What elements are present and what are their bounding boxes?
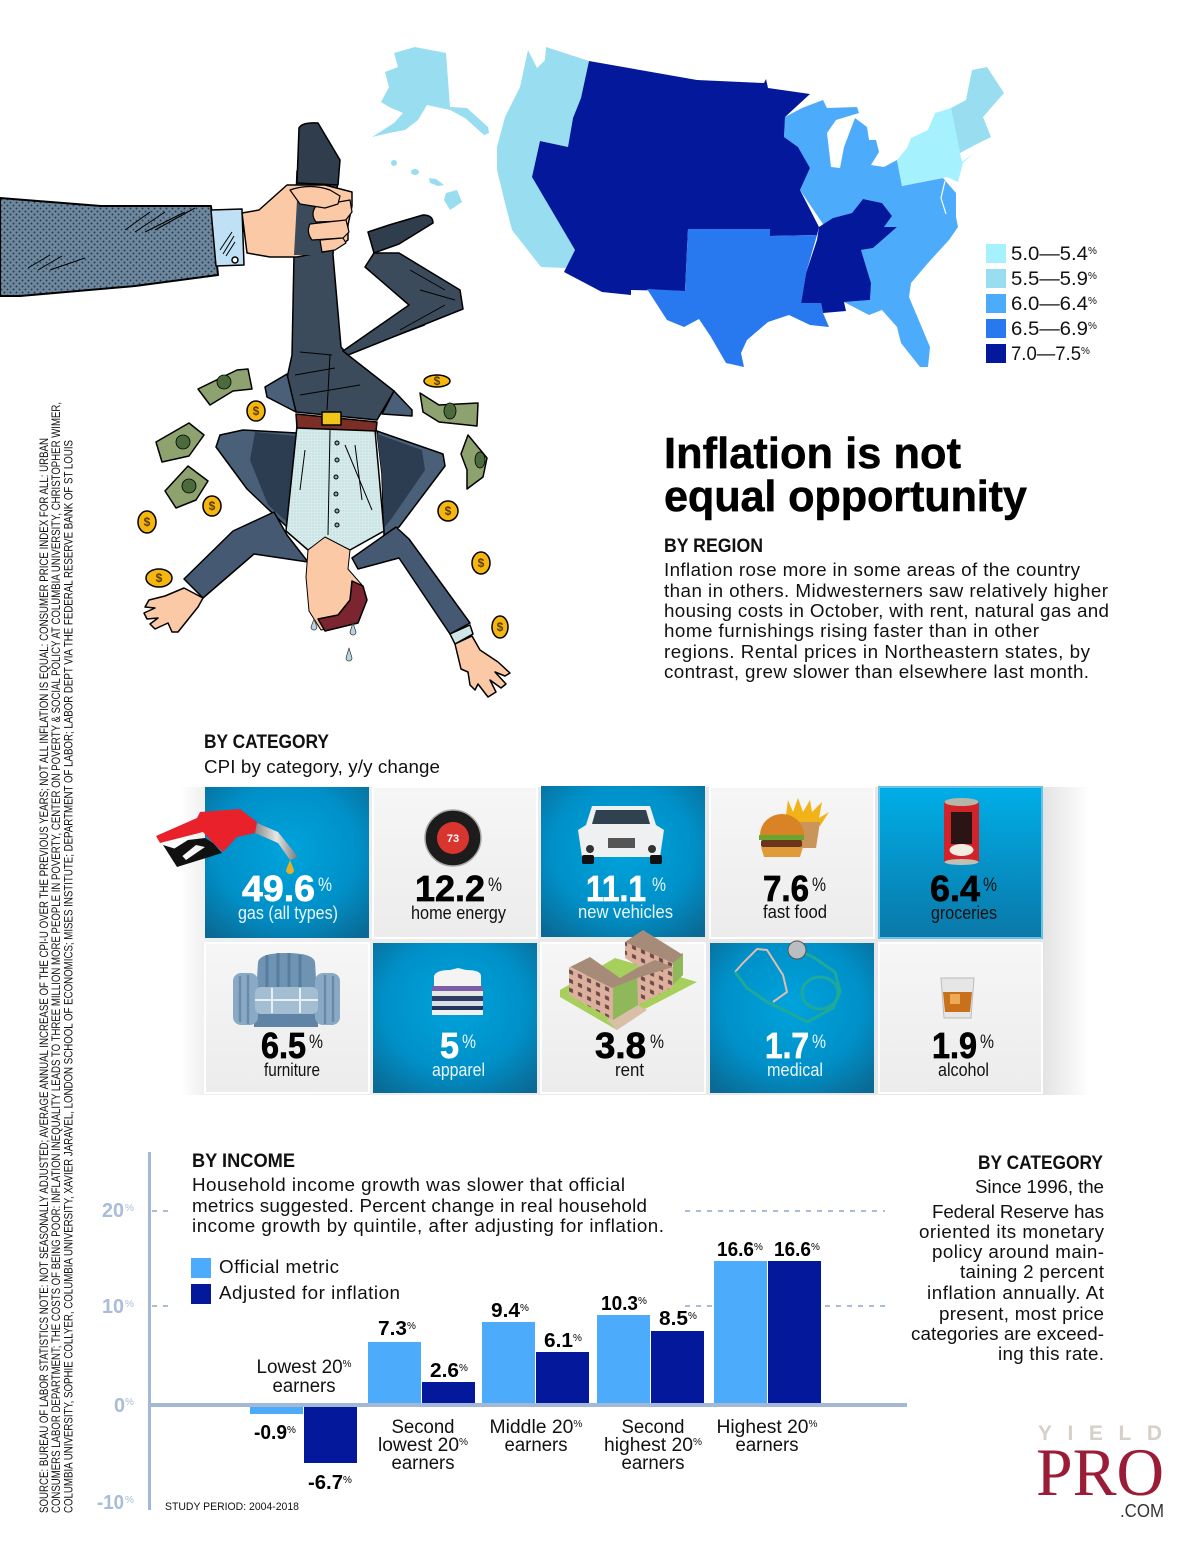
left jacket lining <box>250 432 300 522</box>
group: second highest 20% <box>597 1293 704 1474</box>
group: middle 20%: 6.1 <box>544 1330 573 1352</box>
gold coins <box>138 375 508 638</box>
study period note: STUDY PERIOD: 2004-2018 <box>165 1501 299 1513</box>
right jacket flap <box>377 431 445 535</box>
group: second lowest 20%: earners <box>392 1453 454 1474</box>
card: medical: 1.7 <box>765 1025 809 1066</box>
gridlines <box>152 1211 885 1306</box>
card: gas: gas (all types) <box>238 903 338 923</box>
fingers <box>290 186 352 252</box>
card: medical: medical <box>767 1060 823 1080</box>
group: second lowest 20%: Second <box>392 1417 454 1438</box>
region: Midwest and Southeast <box>784 100 958 367</box>
text block: by category sidebar: BY CATEGORY <box>978 1153 1103 1174</box>
y axis labels: 20 <box>102 1200 124 1222</box>
group: highest 20%: Highest 20 <box>716 1417 807 1438</box>
group: lowest 20%: % <box>343 1475 352 1486</box>
group: second highest 20%: earners <box>622 1453 684 1474</box>
right cuff <box>450 625 473 644</box>
card: fast food <box>710 787 874 938</box>
group: highest 20%: % <box>808 1419 818 1430</box>
icon: whisky glass <box>941 978 974 1018</box>
icon: stethoscope <box>735 941 840 1022</box>
left jacket flap <box>216 430 301 527</box>
y axis labels: % <box>125 1203 134 1214</box>
icon: fuel nozzle <box>156 809 298 874</box>
held shoe <box>297 123 340 185</box>
y axis labels: % <box>125 1397 134 1408</box>
card: fast food: fast food <box>763 902 827 922</box>
y axis labels: % <box>125 1299 134 1310</box>
panel: CPI category grid <box>156 786 1090 1095</box>
shirt buttons and folds <box>300 430 372 535</box>
source note <box>37 402 76 1513</box>
group: middle 20%: % <box>573 1333 582 1344</box>
group: second highest 20%: 8.5 <box>659 1308 688 1330</box>
card: apparel: apparel <box>432 1060 485 1080</box>
card: home energy: 12.2 <box>415 868 485 909</box>
group: second lowest 20%: 7.3 <box>378 1318 407 1340</box>
group: middle 20%: % <box>520 1303 529 1314</box>
group: second highest 20%: % <box>693 1437 702 1448</box>
region: Mid-Atlantic states <box>897 108 974 186</box>
chart legend: Adjusted for inflation <box>219 1282 400 1303</box>
coin dollar signs: $ <box>144 515 151 529</box>
source note: COLUMBIA UNIVERSITY, SOPHIE COLLYER, COLUMBIA UNIVERSITY, XAVIER JARAVEL, LONDON SCHOOL OF ECONOMICS; MISES INSTITUTE; DEPARTMENT OF LABOR; LABOR DEPT VIA THE FEDERAL RESERVE BANK OF ST LOUIS <box>62 440 76 1513</box>
group: highest 20%: % <box>754 1242 763 1253</box>
y axis labels: 10 <box>102 1296 124 1318</box>
trouser wrinkles <box>295 270 455 410</box>
group: lowest 20%: % <box>287 1425 296 1436</box>
card: furniture: furniture <box>264 1060 320 1080</box>
card: apparel: 5 <box>440 1025 459 1066</box>
left jacket tail <box>265 374 296 412</box>
group: second highest 20%: % <box>688 1311 697 1322</box>
map legend: 5.0—5.4 <box>1011 244 1088 265</box>
text block: by category sidebar: categories are exceed- <box>911 1323 1104 1344</box>
map legend: 7.0—7.5 <box>1011 344 1081 365</box>
region: West South Central states <box>647 229 829 367</box>
card: furniture: 6.5 <box>261 1025 306 1066</box>
text block: by region: contrast, grew slower than elsewhere last month. <box>664 661 1089 682</box>
card: new vehicles <box>541 786 705 937</box>
icon: folded clothes <box>432 968 483 1015</box>
y axis labels <box>97 1200 134 1514</box>
map: inflation by US region <box>372 47 1004 367</box>
card: rent: rent <box>615 1060 644 1080</box>
map legend: 6.5—6.9 <box>1011 319 1088 340</box>
group: highest 20%: 16.6 <box>717 1239 754 1261</box>
icon: thermostat: 73 <box>447 833 459 845</box>
card: fast food: % <box>812 875 826 896</box>
card: alcohol <box>879 943 1042 1093</box>
group: lowest 20%: % <box>343 1359 352 1370</box>
group: second lowest 20%: % <box>459 1437 468 1448</box>
gripping hand <box>242 185 352 257</box>
card: furniture <box>205 943 369 1093</box>
map legend: 5.5—5.9 <box>1011 269 1088 290</box>
heading: by category: BY CATEGORY <box>204 732 329 753</box>
card: groceries: groceries <box>931 903 997 923</box>
y axis labels: 0 <box>114 1395 125 1417</box>
map legend <box>986 244 1097 365</box>
card: gas <box>156 787 369 938</box>
text block: by region: regions. Rental prices in Northeastern states, by <box>664 641 1091 662</box>
coin dollar signs: $ <box>445 504 452 518</box>
Chesapeake bay <box>941 181 946 214</box>
coin dollar signs: $ <box>497 620 504 634</box>
region: Pacific states <box>497 47 589 268</box>
card: medical: % <box>812 1032 826 1053</box>
map legend: % <box>1088 271 1097 282</box>
text block: by category sidebar: ing this rate. <box>998 1343 1104 1364</box>
card: groceries: 6.4 <box>930 868 980 909</box>
text block: by category sidebar: inflation annually. At <box>927 1282 1105 1303</box>
group: middle 20%: earners <box>504 1435 568 1456</box>
text block: by region: than in others. Midwesterners saw relatively higher <box>664 580 1108 601</box>
group: middle 20%: Middle 20 <box>490 1417 572 1438</box>
map legend: % <box>1088 321 1097 332</box>
icon: food can <box>944 798 979 865</box>
region: New England <box>951 67 1004 153</box>
card: new vehicles: new vehicles <box>578 902 673 922</box>
text block: by category sidebar: present, most price <box>939 1303 1104 1324</box>
y axis labels: % <box>125 1495 134 1506</box>
bar chart: income growth by quintile <box>97 1152 907 1514</box>
card: gas: % <box>318 875 332 896</box>
card: rent: 3.8 <box>595 1025 646 1066</box>
card: apparel: % <box>462 1032 476 1053</box>
icon: armchair <box>233 953 340 1027</box>
belt buckle <box>322 412 341 425</box>
group: second highest 20%: % <box>638 1296 647 1307</box>
map legend: % <box>1088 296 1097 307</box>
card: alcohol: 1.9 <box>932 1025 977 1066</box>
group: second highest 20%: highest 20 <box>604 1435 692 1456</box>
text block: by category sidebar: policy around main- <box>932 1241 1104 1262</box>
group: highest 20%: 16.6 <box>774 1239 811 1261</box>
card: groceries <box>879 787 1042 938</box>
text block: by region: housing costs in October, with rent, natural gas and <box>664 600 1109 621</box>
title: equal opportunity <box>664 473 1027 521</box>
held trouser leg <box>287 171 394 420</box>
text block: by category sidebar: taining 2 percent <box>960 1261 1105 1282</box>
text block: by region <box>664 536 1109 682</box>
group: middle 20%: 9.4 <box>491 1300 521 1322</box>
heading: by category <box>204 732 440 777</box>
text block: by category sidebar: Federal Reserve has <box>932 1201 1104 1222</box>
logo: Yield Pro: PRO <box>1036 1434 1164 1510</box>
left arm <box>184 512 308 598</box>
group: lowest 20%: -6.7 <box>308 1472 343 1494</box>
coin dollar signs <box>144 374 504 634</box>
group: lowest 20% <box>250 1357 357 1494</box>
card: home energy: home energy <box>411 903 506 923</box>
icon: apartment buildings <box>560 930 697 1030</box>
region: Alaska and Hawaii <box>372 47 489 210</box>
chart legend <box>191 1256 400 1304</box>
map legend: % <box>1081 346 1090 357</box>
text block: by category sidebar: Since 1996, the <box>975 1176 1104 1197</box>
coin dollar signs: $ <box>209 499 216 513</box>
logo: Yield Pro: .COM <box>1120 1501 1164 1521</box>
title: Inflation is not <box>664 430 961 478</box>
group: second lowest 20%: % <box>407 1321 416 1332</box>
text block: by region: Inflation rose more in some areas of the country <box>664 559 1081 580</box>
text block: by region: home furnishings rising faster than in other <box>664 620 1039 641</box>
group: lowest 20%: Lowest 20 <box>256 1357 343 1378</box>
right jacket tail <box>382 391 412 416</box>
belt <box>296 414 377 431</box>
source note: CONSUMERS LABOR DEPARTMENT; THE COSTS OF BEING POOR: INFLATION INEQUALITY LEADS TO THREE MILLION MORE PEOPLE IN POVERTY, CENTER ON POVERTY & SOCIAL POLICY AT COLUMBIA UNIVERSITY, CHRISTOPHER WIMER, <box>49 402 63 1513</box>
group: second lowest 20%: 2.6 <box>430 1360 459 1382</box>
card: gas: 49.6 <box>242 868 315 909</box>
y axis <box>148 1152 151 1510</box>
hair <box>318 581 367 631</box>
coin dollar signs: $ <box>156 571 163 585</box>
group: highest 20%: earners <box>736 1435 798 1456</box>
right jacket lining <box>377 434 425 528</box>
card: home energy: % <box>488 875 502 896</box>
title <box>664 430 1027 521</box>
coin dollar signs: $ <box>434 374 441 388</box>
text block: by region: BY REGION <box>664 536 763 557</box>
region: Mountain and Plains states <box>532 61 819 295</box>
group: second highest 20%: Second <box>622 1417 684 1438</box>
shirt <box>286 426 384 550</box>
shirt cuff <box>211 209 244 266</box>
head <box>306 537 367 630</box>
card: alcohol: % <box>980 1032 994 1053</box>
text block: by income: BY INCOME <box>192 1151 295 1172</box>
group: lowest 20%: earners <box>272 1376 336 1397</box>
chart legend: Official metric <box>219 1256 339 1277</box>
group: middle 20%: % <box>573 1419 583 1430</box>
card: medical <box>710 941 874 1093</box>
text block: by income: Household income growth was slower that official <box>192 1174 625 1195</box>
group: second lowest 20%: lowest 20 <box>378 1435 458 1456</box>
card: alcohol: alcohol <box>938 1060 989 1080</box>
coin dollar signs: $ <box>253 404 260 418</box>
text block: by income: income growth by quintile, after adjusting for inflation. <box>192 1215 664 1236</box>
group: highest 20%: % <box>811 1242 820 1253</box>
text block: by income: metrics suggested. Percent change in real household <box>192 1195 647 1216</box>
y axis labels: -10 <box>97 1492 124 1514</box>
card: rent <box>541 930 705 1093</box>
right hand <box>455 636 510 697</box>
icon: white car <box>578 806 664 864</box>
free shoe <box>368 215 433 253</box>
icon: burger and fries <box>759 798 829 857</box>
card: new vehicles: 11.1 <box>586 868 646 909</box>
card: home energy <box>373 787 537 938</box>
text block: by income <box>192 1151 664 1236</box>
icon: thermostat <box>425 810 481 866</box>
card: rent: % <box>650 1032 664 1053</box>
wrapped trouser over palm <box>294 200 322 255</box>
group: middle 20% <box>482 1300 589 1456</box>
right arm <box>352 527 470 634</box>
source note: SOURCE: BUREAU OF LABOR STATISTICS NOTE: NOT SEASONALLY ADJUSTED; AVERAGE ANNUAL INCREASE OF THE CPI-U OVER THE PREVIOUS YEARS; NOT ALL INFLATION IS EQUAL: CONSUMER PRICE INDEX FOR ALL: URBAN <box>37 438 51 1513</box>
map legend: % <box>1088 246 1097 257</box>
cuff button <box>232 257 238 263</box>
card: new vehicles: % <box>652 875 666 896</box>
tear drops <box>311 619 356 661</box>
cuff detail <box>220 232 235 256</box>
sleeve hatching <box>28 208 195 270</box>
free trouser leg <box>343 253 463 355</box>
card: furniture: % <box>309 1032 323 1053</box>
map legend: 6.0—6.4 <box>1011 294 1088 315</box>
card: groceries: % <box>983 875 997 896</box>
logo: Yield Pro: YIELD <box>1038 1422 1162 1445</box>
group: second lowest 20%: % <box>459 1363 468 1374</box>
suit sleeve <box>0 198 218 296</box>
group: second highest 20%: 10.3 <box>601 1293 638 1315</box>
card: fast food: 7.6 <box>763 868 809 909</box>
group: highest 20% <box>714 1239 821 1456</box>
bill portraits <box>176 375 485 493</box>
text block: by category sidebar: oriented its monetary <box>919 1221 1105 1242</box>
zero line <box>148 1403 907 1407</box>
card: apparel <box>373 943 537 1093</box>
group: second lowest 20% <box>368 1318 475 1474</box>
heading: by category: CPI by category, y/y change <box>204 756 440 777</box>
group: lowest 20%: -0.9 <box>254 1422 287 1444</box>
dollar bills <box>156 369 487 508</box>
region: East South Central states <box>801 199 897 313</box>
text block: by category sidebar <box>911 1153 1105 1364</box>
left hand <box>144 588 203 632</box>
illustration: hand shaking money from an upside-down man <box>0 123 510 697</box>
coin dollar signs: $ <box>478 556 485 570</box>
